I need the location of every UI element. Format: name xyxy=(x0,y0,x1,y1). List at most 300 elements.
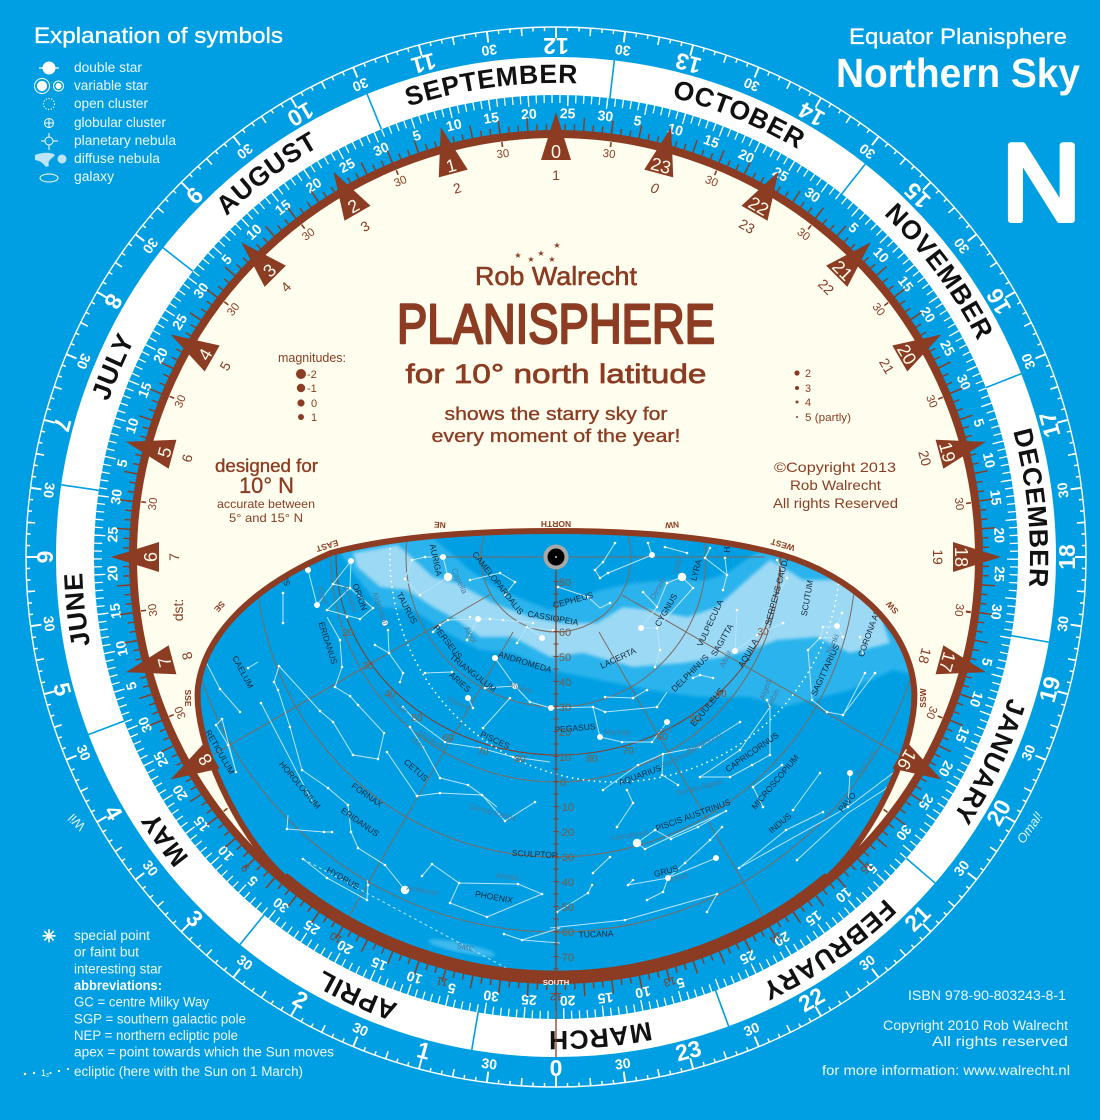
hour labels: 12 xyxy=(543,33,569,59)
star names: Menkar xyxy=(384,691,410,716)
date labels: 30 xyxy=(954,372,975,393)
date labels: 25 xyxy=(737,947,758,968)
brightest stars xyxy=(405,577,682,890)
date labels: 10 xyxy=(832,884,855,906)
month names: JANUARY xyxy=(956,699,1024,826)
RA scale numbers: 70 xyxy=(477,747,489,758)
pointers over window edge: 16 xyxy=(893,746,920,773)
constellation names: VULPECULA xyxy=(695,598,725,648)
panel: special points and abbreviations: or faint but xyxy=(74,945,139,960)
hour pointers: 23 xyxy=(649,154,673,178)
horizon labels: NW xyxy=(664,520,679,531)
half hour labels: 30 xyxy=(40,615,58,633)
constellation names: CETUS xyxy=(402,757,430,784)
panel: disc title block xyxy=(397,241,715,446)
half hour disc labels: 30 xyxy=(496,148,510,161)
panel: date scale xyxy=(86,87,1026,1027)
hidden hour numerals on the rim: 9 xyxy=(239,861,252,874)
date labels: 25 xyxy=(150,748,171,770)
declination scale xyxy=(556,565,574,1057)
RA scale numbers: 20 xyxy=(342,628,354,639)
horizon labels: SE xyxy=(212,599,227,614)
constellation names: SERPENS CAUDA xyxy=(763,553,791,626)
hour labels: 3 xyxy=(181,905,208,932)
date labels: 30 xyxy=(597,107,614,125)
date labels: 20 xyxy=(334,937,355,958)
date labels: 10 xyxy=(666,120,685,139)
constellation names: CASSIOPEIA xyxy=(527,609,580,627)
hour labels: 11 xyxy=(408,48,439,79)
date labels: 30 xyxy=(988,603,1005,621)
declination scale: -70 xyxy=(558,952,574,964)
hour pointers: 8 xyxy=(178,650,196,662)
date labels: 15 xyxy=(190,813,212,835)
legend: magnitudes faint: 5 (partly) xyxy=(805,412,851,424)
heading: explanation of symbols: Explanation of symbols xyxy=(34,23,283,48)
star names: SMC xyxy=(456,941,475,954)
constellation names: TUCANA xyxy=(578,928,614,940)
date labels: 20 xyxy=(917,304,939,326)
tagline: every moment of the year! xyxy=(432,425,680,446)
constellation names xyxy=(203,541,884,940)
hour pointers: 23 xyxy=(736,215,758,237)
date labels: 5 xyxy=(864,860,881,877)
hour pointers: 20 xyxy=(893,341,920,368)
constellation names: INDUS xyxy=(767,810,794,835)
declination scale: -60 xyxy=(558,927,574,939)
star names: Rigel xyxy=(315,585,330,605)
date labels: 15 xyxy=(597,989,614,1007)
stars above name: ★ xyxy=(548,255,556,264)
month names: FEBRUARY xyxy=(767,899,896,1001)
panel: sky window xyxy=(194,528,918,976)
constellation names: ARIES xyxy=(447,670,473,694)
constellation names: ORION xyxy=(351,582,369,612)
hour pointers: 20 xyxy=(915,449,935,468)
half hour disc labels: 30 xyxy=(923,704,939,721)
month names: JULY xyxy=(92,332,132,400)
date labels: 5 xyxy=(970,417,988,429)
date labels: 10 xyxy=(214,842,237,865)
title: equator planisphere northern sky: Northern Sky xyxy=(836,50,1080,96)
declination scale: -40 xyxy=(558,877,574,889)
constellation names: PERSEUS xyxy=(432,623,465,661)
date labels: 30 xyxy=(134,714,155,735)
star names xyxy=(315,554,879,954)
constellation names: PISCIS AUSTRINUS xyxy=(654,797,732,833)
panel: special points and abbreviations: abbreviations: xyxy=(74,978,162,993)
date labels: 25 xyxy=(915,791,937,813)
legend: magnitudes bright: magnitudes: xyxy=(278,351,346,365)
date labels: 5 xyxy=(122,680,140,692)
declination scale: 40 xyxy=(559,677,571,689)
dst label: dst: xyxy=(170,599,186,621)
month names: NOVEMBER xyxy=(885,202,992,340)
half hour labels: 30 xyxy=(481,1055,498,1073)
coordinate grid xyxy=(202,536,910,932)
date labels: 20 xyxy=(736,145,757,167)
hour pointers: 5 xyxy=(154,445,176,460)
date labels: 20 xyxy=(991,527,1008,544)
date labels: 15 xyxy=(368,954,389,975)
hidden hour numerals on the rim: 13 xyxy=(662,974,677,988)
date labels xyxy=(104,105,1008,1009)
legend labels: open cluster xyxy=(74,96,149,111)
constellation names: RETICULUM xyxy=(203,728,237,776)
hour labels: 21 xyxy=(899,900,936,937)
panel: special points and abbreviations: apex = point towards which the Sun moves xyxy=(74,1045,334,1060)
hour labels: 17 xyxy=(1034,409,1065,440)
declination scale: -20 xyxy=(558,827,574,839)
star names: Deneb xyxy=(648,576,668,601)
half hour disc labels: 30 xyxy=(173,393,189,410)
horizon labels: SW xyxy=(883,599,901,616)
hour labels: 20 xyxy=(981,795,1016,830)
constellation names: MICROSCOPIUM xyxy=(749,753,801,811)
centre pin xyxy=(544,544,568,570)
half hour labels: 30 xyxy=(741,1019,762,1039)
legend labels: globular cluster xyxy=(74,115,167,130)
star names: Algol xyxy=(462,625,479,645)
constellation names: PEGASUS xyxy=(554,721,596,735)
half hour disc labels: 30 xyxy=(952,603,965,617)
date labels: 25 xyxy=(937,337,958,359)
month names: MAY xyxy=(140,816,188,868)
half hour labels: 30 xyxy=(40,482,58,499)
date labels: 15 xyxy=(952,724,973,745)
half hour disc labels: 30 xyxy=(869,301,887,319)
hidden hour numerals on the rim: 12 xyxy=(550,990,562,1002)
icon: galaxy xyxy=(40,174,58,182)
star names: Ankaa xyxy=(496,871,519,882)
constellation names: CEPHEUS xyxy=(552,590,594,610)
star names: Algedi xyxy=(758,677,774,701)
date labels: 15 xyxy=(895,273,917,295)
half hour labels: 30 xyxy=(614,41,631,59)
hour pointers: 2 xyxy=(451,179,463,197)
half hour labels: 30 xyxy=(139,235,162,257)
date labels: 25 xyxy=(770,163,792,185)
hour pointers: 6 xyxy=(141,552,161,562)
milky way inner band xyxy=(353,545,890,667)
date labels: 10 xyxy=(243,220,265,243)
hidden hour numerals on the rim: 10 xyxy=(328,929,345,945)
RA scale numbers: 70 xyxy=(622,746,634,757)
date labels: 10 xyxy=(444,115,463,134)
panel: special points and abbreviations xyxy=(24,927,334,1079)
half hour labels: 30 xyxy=(614,1055,632,1073)
declination scale: 60 xyxy=(559,627,571,639)
hour pointers: 18 xyxy=(915,646,935,666)
month names: AUGUST xyxy=(219,131,314,216)
constellation names: ANDROMEDA xyxy=(497,649,553,675)
stars above name: ★ xyxy=(527,255,535,264)
month names: APRIL xyxy=(322,970,398,1019)
stars above name: ★ xyxy=(553,241,561,250)
declination scale: 50 xyxy=(559,652,571,664)
constellation names: HYDRUS xyxy=(325,865,361,891)
half hour labels: 30 xyxy=(856,951,878,973)
hour pointers: 18 xyxy=(951,547,971,567)
panel: symbol legend xyxy=(34,23,283,184)
constellation names: AURIGA xyxy=(428,543,444,577)
horizon labels: SSW xyxy=(918,687,928,708)
date labels: 20 xyxy=(771,928,793,950)
legend: magnitudes bright: -2 xyxy=(307,369,317,381)
month names: MARCH xyxy=(550,1022,652,1050)
star names: Aldebaran xyxy=(370,590,391,628)
south label: SOUTH xyxy=(543,978,569,987)
date labels: 10 xyxy=(404,968,424,988)
half hour disc labels: 30 xyxy=(794,226,812,244)
hour labels: 22 xyxy=(794,982,829,1017)
hour labels: 8 xyxy=(99,289,128,314)
hour pointers: 5 xyxy=(216,358,234,373)
star names: Dabih xyxy=(764,687,782,710)
date labels: 5 xyxy=(446,980,457,997)
hour pointers: 19 xyxy=(930,549,946,565)
icon: ecliptic dots: 3 xyxy=(46,1073,49,1079)
pointers over window edge xyxy=(163,742,949,792)
hour pointers: 3 xyxy=(259,260,280,281)
bright stars xyxy=(308,555,850,878)
star names: Markab xyxy=(604,728,631,737)
latitude subtitle: for 10° north latitude xyxy=(406,359,706,389)
legend labels: diffuse nebula xyxy=(74,151,160,166)
month names: JUNE xyxy=(64,574,90,646)
legend: magnitudes faint: 4 xyxy=(805,397,811,409)
magellanic cloud xyxy=(428,938,496,958)
main title: PLANISPHERE xyxy=(397,292,715,355)
legend labels: double star xyxy=(74,60,143,75)
small stars xyxy=(216,543,897,970)
tagline: shows the starry sky for xyxy=(444,403,668,424)
hour labels: 10 xyxy=(283,97,318,132)
legend labels: variable star xyxy=(74,78,148,93)
text: designed for: 5° and 15° N xyxy=(229,511,303,525)
half hour labels: 30 xyxy=(1054,615,1072,632)
hidden hour numerals on the rim: 15 xyxy=(858,859,875,876)
panel: special points and abbreviations: interesting star xyxy=(74,961,162,976)
date labels: 10 xyxy=(112,639,131,658)
date labels: 10 xyxy=(634,983,652,1002)
hour labels: 16 xyxy=(981,284,1016,319)
horizon labels: WEST xyxy=(769,536,796,553)
date labels: 5 xyxy=(674,974,687,992)
date labels: 25 xyxy=(336,155,358,176)
constellation names: GRUS xyxy=(653,863,679,879)
constellation names: SCUTUM xyxy=(799,579,815,617)
constellation names: HE xyxy=(722,541,732,553)
hour pointers: 21 xyxy=(828,256,857,285)
date labels: 30 xyxy=(270,894,292,917)
panel: special points and abbreviations: SGP = southern galactic pole xyxy=(74,1011,246,1026)
legend: magnitudes bright: 1 xyxy=(311,412,317,424)
half hour disc labels: 30 xyxy=(173,704,189,721)
constellation names: LYRA xyxy=(688,558,704,582)
declination scale: 0 xyxy=(560,777,566,789)
window lower rim xyxy=(284,877,828,976)
text: copyright: All rights Reserved xyxy=(773,495,898,511)
hour pointers: 2 xyxy=(344,195,363,217)
date labels: 20 xyxy=(104,565,121,581)
legend labels xyxy=(74,60,177,184)
constellation names: AQUILA xyxy=(736,637,760,669)
panel: publication info: Copyright 2010 Rob Walrecht xyxy=(883,1018,1068,1033)
date labels: 5 xyxy=(244,873,261,890)
half hour disc labels: 30 xyxy=(392,174,409,190)
half hour labels: 30 xyxy=(741,74,762,95)
constellation names: PISCES xyxy=(479,729,512,751)
panel: special points and abbreviations: NEP = northern ecliptic pole xyxy=(74,1028,238,1043)
date labels: 25 xyxy=(560,105,576,121)
hour pointers: 6 xyxy=(178,452,196,464)
RA scale numbers: 60 xyxy=(442,733,454,744)
half hour labels: 30 xyxy=(73,351,94,372)
date labels: 15 xyxy=(482,109,500,127)
month names: DECEMBER xyxy=(1014,428,1048,586)
hour labels: 2 xyxy=(288,985,313,1014)
date labels: 10 xyxy=(966,689,987,709)
half hour disc labels: 30 xyxy=(952,497,965,511)
hour pointers xyxy=(111,112,1001,687)
constellation names: EQUULEUS xyxy=(688,686,726,728)
date labels: 5 xyxy=(410,127,423,144)
hour pointers: 4 xyxy=(277,278,294,295)
star names: Sadalmelik xyxy=(659,745,699,770)
date labels: 25 xyxy=(169,311,190,333)
date labels: 30 xyxy=(371,138,392,159)
icon: planetary nebula xyxy=(41,133,58,150)
hour labels: 7 xyxy=(48,415,77,434)
RA scale numbers: 40 xyxy=(384,689,396,700)
half hour disc labels: 30 xyxy=(703,174,720,190)
pointers over window edge: 8 xyxy=(194,750,216,769)
panel: rotating disc xyxy=(89,90,1023,1024)
declination scale: 20 xyxy=(559,727,571,739)
star names: Hamal xyxy=(447,695,472,713)
half hour disc labels: 30 xyxy=(147,497,160,511)
hour pointers: 7 xyxy=(154,654,176,669)
half hour labels: 30 xyxy=(1018,742,1039,763)
stars above name: ★ xyxy=(514,251,522,260)
RA scale numbers: 30 xyxy=(757,627,769,638)
horizon labels: EAST xyxy=(314,538,340,554)
text: designed for: designed for xyxy=(215,456,318,476)
hour labels: 14 xyxy=(794,97,829,132)
hour pointers: 7 xyxy=(166,553,182,561)
icon: special point: ✳ xyxy=(42,927,56,947)
legend: magnitudes faint: 3 xyxy=(805,383,811,395)
date labels: 15 xyxy=(272,196,294,218)
star names: Mira xyxy=(409,735,427,752)
hour pointers: 22 xyxy=(745,193,772,220)
half hour labels: 30 xyxy=(74,742,94,763)
panel: special points and abbreviations: ecliptic (here with the Sun on 1 March) xyxy=(74,1064,303,1079)
legend labels: galaxy xyxy=(74,169,114,184)
declination scale: -30 xyxy=(558,852,574,864)
big letter N: N xyxy=(1002,122,1081,244)
hour pointers: 0 xyxy=(649,179,661,197)
half hour disc labels: 30 xyxy=(147,603,160,617)
date labels: 25 xyxy=(104,526,121,543)
hour labels: 15 xyxy=(899,177,936,214)
constellation names: CAELUM xyxy=(230,654,256,690)
RA scale numbers xyxy=(342,627,769,765)
half hour labels: 30 xyxy=(140,857,162,879)
hour pointers: 1 xyxy=(552,167,560,183)
text: copyright xyxy=(773,459,898,511)
date labels: 20 xyxy=(169,782,191,804)
star names: Enif xyxy=(658,725,674,736)
half hour labels: 30 xyxy=(350,1019,371,1040)
date labels: 15 xyxy=(701,131,722,151)
half hour labels: 30 xyxy=(950,235,972,257)
stars above name xyxy=(514,241,561,264)
date labels: 30 xyxy=(893,822,915,844)
hour pointers: 21 xyxy=(876,355,898,377)
constellation names: ERIDANUS xyxy=(339,805,381,839)
panel: publication info: ISBN 978-90-803243-8-1 xyxy=(908,988,1066,1003)
legend: magnitudes bright: -1 xyxy=(307,383,317,395)
hour pointers: 17 xyxy=(935,650,959,674)
hour labels: 19 xyxy=(1034,674,1065,705)
star names: Vega xyxy=(672,554,684,574)
legend: magnitudes bright: 0 xyxy=(311,398,317,410)
star names: Sadalsuud xyxy=(685,731,723,755)
constellation names: US xyxy=(280,573,292,587)
constellation names: SCULPTOR xyxy=(512,848,558,860)
constellation names: CAPRICORNUS xyxy=(723,730,781,774)
star names: Capella xyxy=(449,567,469,596)
hour labels: 13 xyxy=(673,48,704,79)
date labels: 25 xyxy=(991,566,1008,582)
constellation names: SAGITTA xyxy=(709,622,735,658)
icon: double star xyxy=(39,62,59,74)
date labels: 15 xyxy=(134,380,155,400)
ecliptic-like brown curve xyxy=(336,554,780,756)
RA scale numbers: 40 xyxy=(715,689,727,700)
half hour disc labels: 30 xyxy=(300,226,318,244)
text: copyright: Rob Walrecht xyxy=(790,477,881,493)
hour pointers: 0 xyxy=(551,142,561,162)
star names: Deneb Kaitos xyxy=(468,802,517,823)
star names: Menkab xyxy=(417,729,446,751)
half hour disc labels: 30 xyxy=(225,301,243,319)
date labels: 5 xyxy=(218,251,235,268)
milky way outer band xyxy=(335,535,915,707)
half hour labels: 30 xyxy=(480,41,498,59)
month names: SEPTEMBER xyxy=(406,64,576,105)
title: equator planisphere northern sky: Equator Planisphere xyxy=(849,24,1067,49)
star names: Bellatrix xyxy=(341,584,360,614)
constellation names: TAURUS xyxy=(395,590,420,626)
RA scale numbers: 80 xyxy=(586,754,598,765)
constellation names: CYGNUS xyxy=(653,591,680,628)
declination scale: 80 xyxy=(559,577,571,589)
star names: Fomalhaut xyxy=(610,828,650,843)
legend labels: planetary nebula xyxy=(74,133,177,148)
horizon labels xyxy=(183,519,928,708)
tagline xyxy=(432,403,680,446)
date labels: 15 xyxy=(106,602,124,620)
RA scale numbers: 50 xyxy=(411,713,423,724)
hour labels: 23 xyxy=(673,1035,704,1066)
RA scale numbers: 30 xyxy=(362,661,374,672)
date labels: 20 xyxy=(303,174,325,196)
date labels: 5 xyxy=(845,219,862,236)
date labels: 5 xyxy=(979,656,996,668)
